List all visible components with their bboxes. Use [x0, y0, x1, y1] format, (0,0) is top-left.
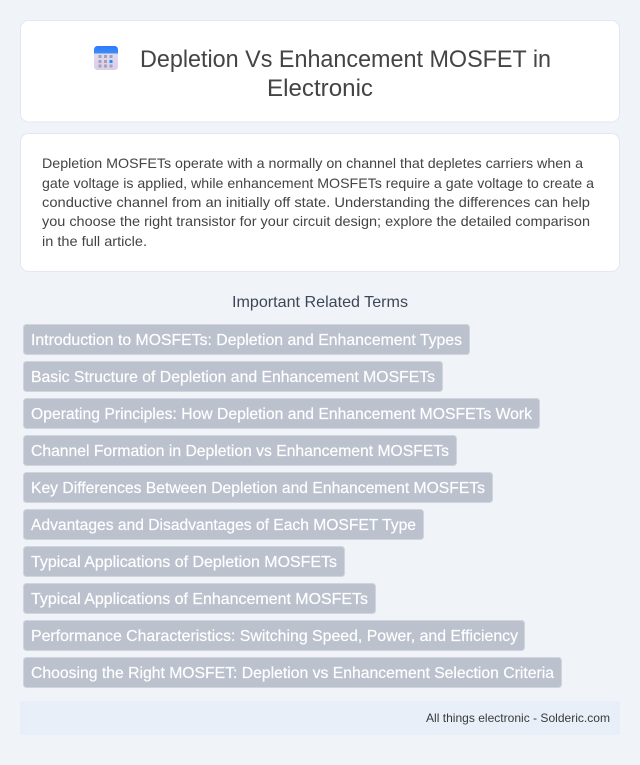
list: related term chips: [24, 324, 562, 688]
text block: introduction paragraph: gate voltage is applied, while enhancement MOSFETs require a gate voltage to create a: [42, 175, 594, 191]
title: Electronic: [267, 75, 373, 102]
text block: introduction paragraph: you choose the right transistor for your circuit design; explore the detailed comparison: [42, 213, 590, 229]
panel: introduction: [20, 134, 620, 272]
chip: choosing: [24, 658, 562, 688]
heading: related terms: Important Related Terms: [232, 294, 408, 311]
text block: introduction paragraph: Depletion MOSFETs operate with a normally on channel that depletes carriers when a: [42, 155, 583, 171]
chip: advantages: [24, 510, 424, 540]
chip: operating principles: [24, 398, 540, 428]
chip: channel formation: [24, 436, 456, 466]
icon: calendar: [94, 46, 118, 70]
chip: key differences: [24, 472, 492, 502]
text block: introduction paragraph: conductive channel from an initially off state. Understanding the differences can help: [42, 194, 590, 210]
chip: choosing: Choosing the Right MOSFET: Depletion vs Enhancement Selection Criteria: [31, 665, 554, 682]
text block: introduction paragraph: in the full article.: [42, 233, 147, 249]
chip: depletion applications: [24, 546, 344, 576]
chip: performance: [24, 620, 524, 650]
chip: introduction: [24, 324, 470, 354]
text block: introduction paragraph: [42, 155, 594, 249]
chip: enhancement applications: Typical Applications of Enhancement MOSFETs: [31, 591, 368, 608]
chip: channel formation: Channel Formation in Depletion vs Enhancement MOSFETs: [31, 443, 449, 460]
chip: key differences: Key Differences Between Depletion and Enhancement MOSFETs: [31, 480, 485, 497]
footer: All things electronic - Solderic.com: [426, 711, 610, 725]
footer: [20, 701, 620, 735]
chip: depletion applications: Typical Applications of Depletion MOSFETs: [31, 554, 337, 571]
chip: basic structure: [24, 362, 442, 392]
panel: title card: [20, 20, 620, 122]
chip: performance: Performance Characteristics: Switching Speed, Power, and Efficiency: [31, 628, 518, 645]
chip: basic structure: Basic Structure of Depletion and Enhancement MOSFETs: [31, 369, 435, 386]
chip: enhancement applications: [24, 584, 376, 614]
title: Depletion Vs Enhancement MOSFET in: [140, 46, 551, 73]
chip: operating principles: Operating Principles: How Depletion and Enhancement MOSFETs Work: [31, 406, 533, 423]
title: [140, 46, 551, 102]
chip: introduction: Introduction to MOSFETs: Depletion and Enhancement Types: [31, 332, 462, 349]
chip: advantages: Advantages and Disadvantages of Each MOSFET Type: [31, 517, 416, 534]
